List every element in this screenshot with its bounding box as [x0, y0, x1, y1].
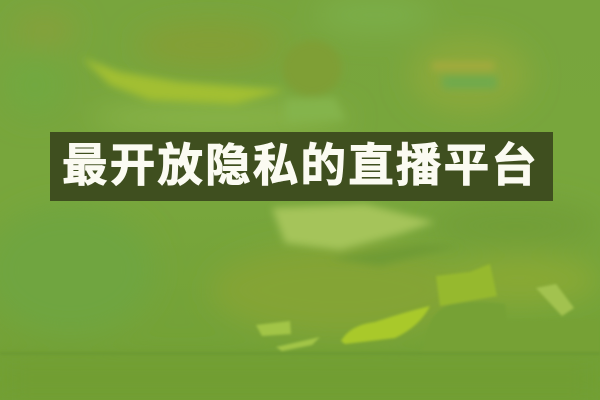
title band	[50, 132, 553, 201]
title: 最开放隐私的直播平台	[62, 140, 539, 191]
